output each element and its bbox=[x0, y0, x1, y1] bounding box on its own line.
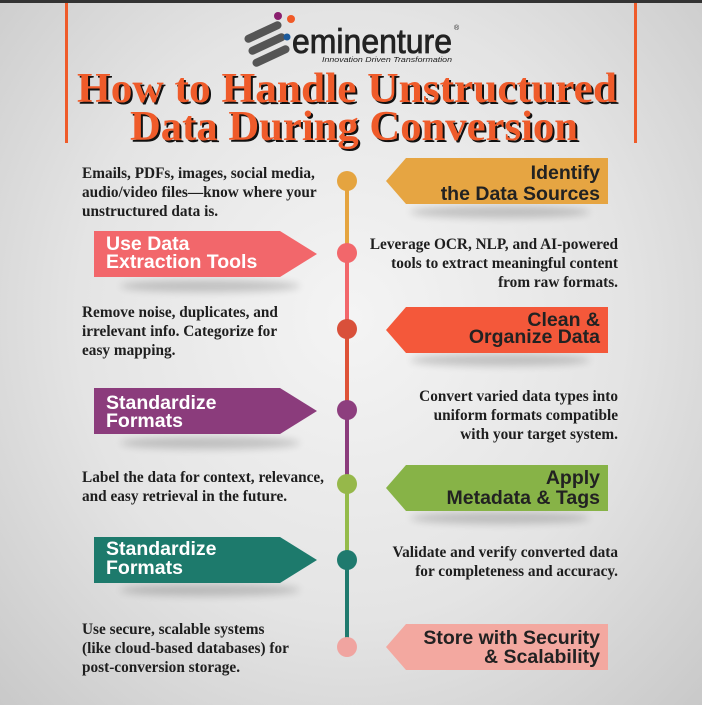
timeline bbox=[345, 181, 349, 647]
step 1: identify: Emails, PDFs, images, social media, bbox=[82, 165, 315, 182]
step 4: standardize bbox=[94, 388, 618, 443]
step 2: extraction: from raw formats. bbox=[498, 274, 618, 291]
step 7: store bbox=[82, 621, 608, 676]
step 3: clean: easy mapping. bbox=[82, 342, 176, 359]
step 4: standardize: with your target system. bbox=[460, 426, 618, 443]
step 4: standardize: Standardize bbox=[106, 392, 217, 414]
step 2: extraction bbox=[94, 231, 619, 291]
step 6: validate: for completeness and accuracy. bbox=[415, 563, 618, 580]
step 2: extraction: Leverage OCR, NLP, and AI-powered bbox=[370, 236, 618, 253]
decorative side lines bbox=[65, 3, 637, 143]
step 1: identify: audio/video files—know where your bbox=[82, 184, 317, 201]
step 2: extraction: Extraction Tools bbox=[106, 251, 257, 273]
logo: eminenture bbox=[292, 23, 452, 61]
step 6: validate bbox=[94, 537, 618, 583]
title bbox=[77, 66, 619, 152]
banner shadows bbox=[120, 206, 590, 596]
step 4: standardize: Formats bbox=[106, 410, 183, 432]
step 1: identify: the Data Sources bbox=[441, 183, 600, 205]
step 1: identify: Identify bbox=[531, 162, 600, 184]
step 5: metadata: Apply bbox=[546, 467, 600, 489]
step 2: extraction: tools to extract meaningful content bbox=[391, 255, 619, 272]
step 1: identify: unstructured data is. bbox=[82, 203, 218, 220]
step 5: metadata: Metadata & Tags bbox=[446, 487, 600, 509]
step 1: identify bbox=[82, 158, 608, 220]
logo bbox=[243, 12, 460, 68]
title: Data During Conversion bbox=[130, 104, 578, 150]
step 2: extraction: Use Data bbox=[106, 233, 190, 255]
logo: ® bbox=[454, 24, 460, 32]
logo: Innovation Driven Transformation bbox=[322, 57, 452, 64]
step 5: metadata: and easy retrieval in the future. bbox=[82, 488, 287, 505]
step 3: clean: Organize Data bbox=[469, 326, 600, 348]
step 6: validate: Formats bbox=[106, 557, 183, 579]
title: Data During Conversion bbox=[132, 106, 580, 152]
step 6: validate: Standardize bbox=[106, 538, 217, 560]
step 3: clean bbox=[82, 304, 608, 359]
step 6: validate: Validate and verify converted data bbox=[393, 544, 618, 561]
step 4: standardize: Convert varied data types into bbox=[419, 388, 618, 405]
step 5: metadata bbox=[82, 465, 608, 511]
step 4: standardize: uniform formats compatible bbox=[434, 407, 618, 424]
step 3: clean: Clean & bbox=[527, 309, 600, 331]
title: How to Handle Unstructured bbox=[79, 68, 619, 114]
step 7: store: & Scalability bbox=[484, 646, 600, 668]
step 7: store: Store with Security bbox=[423, 627, 600, 649]
step 7: store: post-conversion storage. bbox=[82, 659, 240, 676]
step 3: clean: irrelevant info. Categorize for bbox=[82, 323, 277, 340]
step 7: store: Use secure, scalable systems bbox=[82, 621, 264, 638]
title: How to Handle Unstructured bbox=[77, 66, 617, 112]
step 5: metadata: Label the data for context, relevance, bbox=[82, 469, 324, 486]
step 3: clean: Remove noise, duplicates, and bbox=[82, 304, 278, 321]
step 7: store: (like cloud-based databases) for bbox=[82, 640, 289, 657]
